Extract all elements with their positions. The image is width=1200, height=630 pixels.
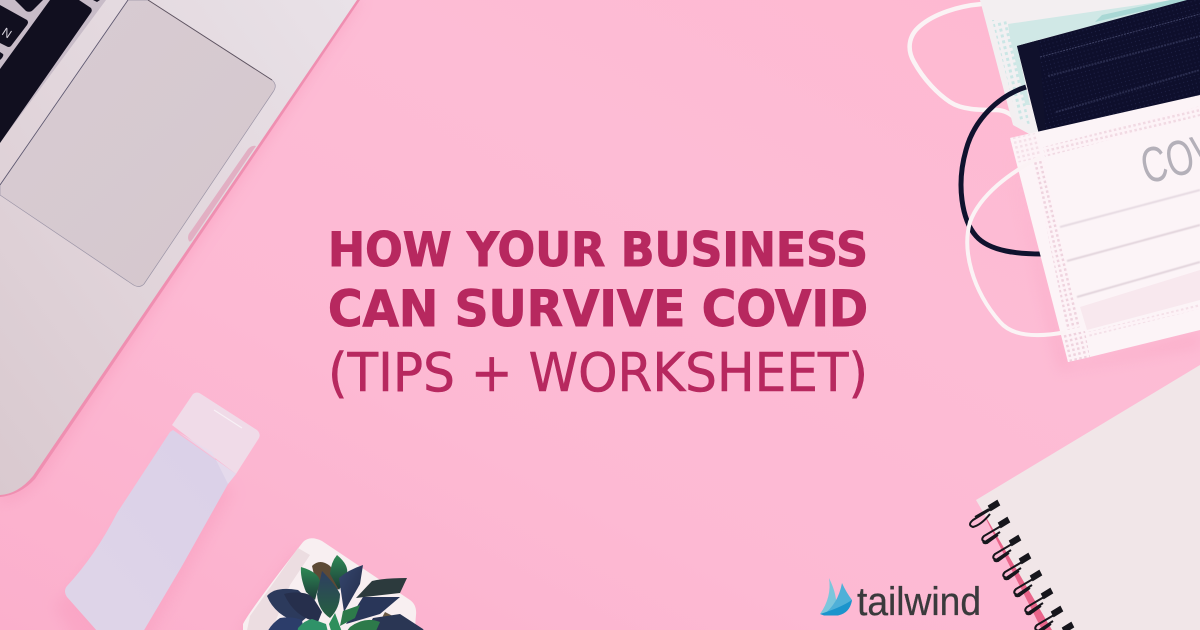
notebook edge: [986, 512, 1056, 630]
keyboard: [0, 0, 106, 143]
spiral 5: [1014, 571, 1041, 596]
leaves: [264, 555, 430, 630]
white pot: [243, 538, 416, 630]
black mask: [1017, 0, 1200, 138]
ear loop: upper white: [910, 4, 1016, 120]
shadow under masks: [1010, 145, 1200, 370]
teal mask: [980, 0, 1200, 140]
tailwind logo: [820, 578, 981, 624]
trackpad: [0, 0, 275, 286]
logo sails: [820, 578, 852, 616]
spiral 3: [993, 536, 1020, 561]
key: N: [0, 5, 28, 47]
title line 3: (TIPS + WORKSHEET): [328, 341, 868, 404]
face masks: [910, 0, 1200, 370]
logo wordmark: tailwind: [857, 580, 981, 624]
side notch: [188, 146, 256, 242]
mask dotted edge: [1033, 157, 1080, 330]
bottle cap: [172, 392, 260, 474]
laptop body: [0, 0, 357, 495]
spiral 7: [1035, 607, 1062, 630]
key: top: [15, 0, 43, 12]
spiral binding: [970, 501, 1073, 630]
key: small: [0, 52, 3, 60]
title line 1: HOW YOUR BUSINESS: [328, 223, 868, 278]
spiral 8: [1063, 623, 1073, 630]
notebook: [970, 365, 1200, 630]
key: corner: [93, 0, 100, 2]
title: [328, 223, 868, 404]
notebook page: [976, 365, 1200, 630]
bottle: [54, 392, 260, 630]
spacebar: [0, 0, 92, 143]
ear loop: black: [961, 87, 1042, 254]
plant pot with succulent: [240, 538, 430, 630]
spiral 2: [982, 518, 1009, 543]
spiral 6: [1025, 589, 1052, 614]
bottle body: [65, 430, 236, 630]
ear loop: lower white: [967, 157, 1066, 335]
title line 2: CAN SURVIVE COVID: [328, 280, 868, 338]
spiral 1: [970, 501, 999, 527]
white mask: [1010, 95, 1200, 362]
laptop: [0, 0, 362, 503]
spiral 4: [1003, 554, 1030, 579]
